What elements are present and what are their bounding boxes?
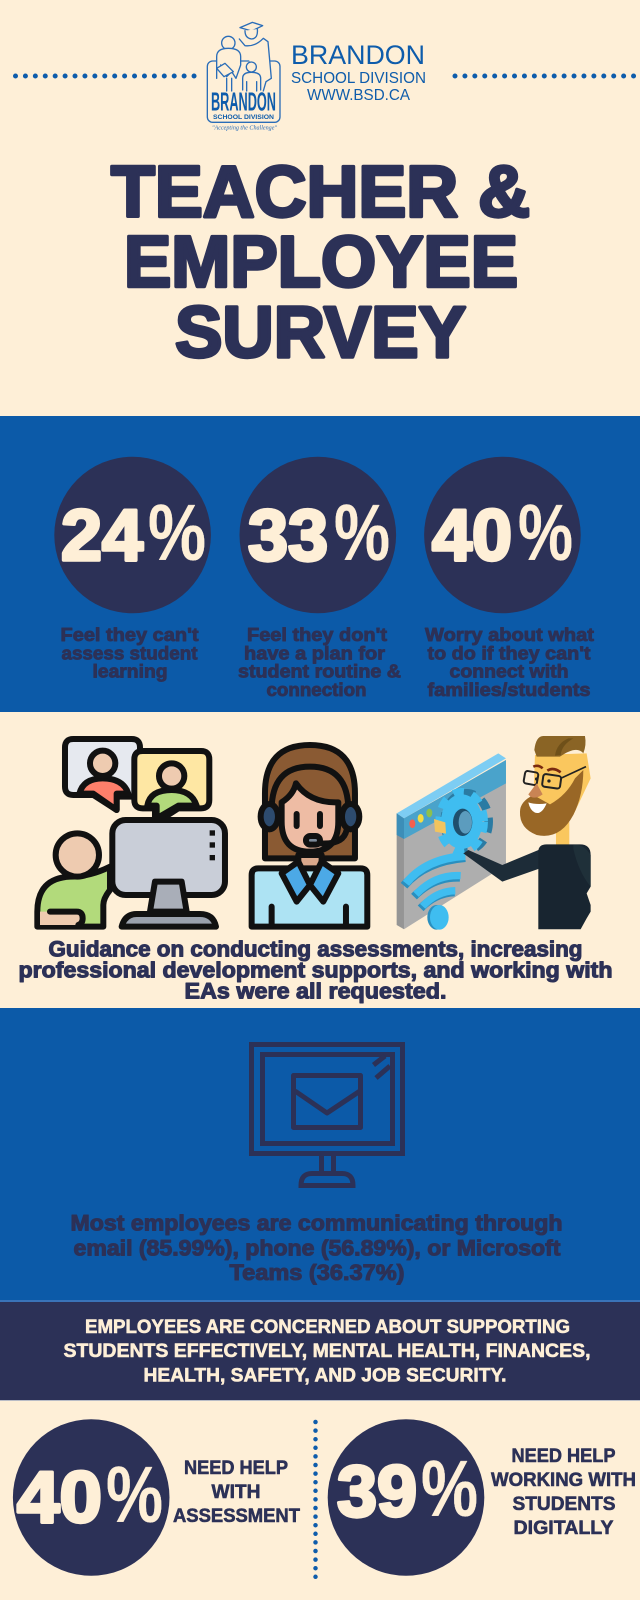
logo: Brandon School Division emblem: BRANDON — [211, 86, 276, 116]
stat 40% need help with assessment: NEED HELP — [184, 1457, 288, 1479]
title — [111, 152, 530, 373]
stat 33%: Feel they don't — [247, 625, 387, 645]
stat 39% need help working digitally — [328, 1419, 636, 1576]
dotted rule right — [455, 74, 634, 78]
text: guidance requested: Guidance on conducting assessments, increasing — [48, 936, 582, 962]
stat 24%: assess student — [62, 644, 198, 664]
stat 24%: learning — [92, 662, 168, 682]
stat 33%: have a plan for — [244, 644, 385, 664]
stat 24%: % — [148, 488, 206, 577]
title: SURVEY — [175, 293, 466, 373]
stat 40%: to do if they can't — [428, 644, 591, 664]
text: guidance requested: professional development supports, and working with — [18, 958, 612, 982]
stat 24% — [54, 457, 211, 682]
stat 40% need help with assessment: ASSESSMENT — [173, 1505, 300, 1527]
organisation name: SCHOOL DIVISION — [291, 70, 426, 87]
stat 24%: Feel they can't — [60, 625, 198, 645]
text: communication channels: Most employees are communicating through — [70, 1210, 562, 1236]
panel: employee concerns — [0, 1300, 640, 1401]
text: communication channels: email (85.99%), phone (56.89%), or Microsoft — [74, 1236, 561, 1260]
organisation name — [291, 40, 426, 104]
stat 40% need help with assessment — [13, 1419, 300, 1576]
stat 33%: student routine & — [238, 662, 401, 682]
logo: Brandon School Division emblem: SCHOOL DIVISION — [213, 114, 274, 121]
stat 40%: families/students — [428, 680, 590, 700]
stat 40%: Worry about what — [425, 625, 594, 645]
panel: help needed — [13, 1419, 636, 1578]
icon: monitor with envelope — [252, 1044, 402, 1186]
panel: employee concerns: EMPLOYEES ARE CONCERNED ABOUT SUPPORTING — [85, 1317, 570, 1338]
title: EMPLOYEE — [124, 222, 518, 302]
panel: stat circles — [0, 416, 640, 712]
stat 33%: % — [334, 488, 390, 577]
stat 24%: 24 — [61, 496, 143, 576]
stat 40%: connect with — [450, 662, 568, 682]
stat 40%: % — [518, 488, 573, 577]
stat 39% need help working digitally: % — [421, 1444, 478, 1533]
panel: employee concerns: STUDENTS EFFECTIVELY, MENTAL HEALTH, FINANCES, — [64, 1341, 590, 1362]
text: communication channels — [70, 1210, 562, 1285]
stat 39% need help working digitally: WORKING WITH — [491, 1469, 636, 1491]
icon: video call at computer — [37, 739, 225, 927]
stat 40% need help with assessment: WITH — [212, 1481, 260, 1503]
organisation name: BRANDON — [291, 40, 425, 70]
stat 40% need help with assessment: % — [106, 1450, 163, 1539]
title: TEACHER & — [111, 152, 530, 232]
stat 33%: connection — [266, 680, 366, 700]
organisation name: WWW.BSD.CA — [307, 87, 410, 104]
text: guidance requested — [18, 936, 612, 1004]
icon: support agent with headset — [252, 745, 367, 927]
header: logo and dotted rules — [16, 22, 634, 132]
text: guidance requested: EAs were all requested. — [184, 978, 446, 1004]
stat 39% need help working digitally: 39 — [337, 1452, 417, 1532]
stat 33%: 33 — [248, 496, 328, 576]
dotted rule left — [16, 74, 195, 78]
text: communication channels: Teams (36.37%) — [230, 1260, 404, 1285]
stat 40% need help with assessment: 40 — [17, 1458, 102, 1538]
stat 40% — [424, 457, 594, 700]
panel: communication channels — [0, 1008, 640, 1300]
stat 39% need help working digitally: DIGITALLY — [514, 1517, 614, 1539]
panel: employee concerns: HEALTH, SAFETY, AND JOB SECURITY. — [144, 1366, 507, 1386]
icon: man adjusting settings on wifi window — [397, 736, 591, 930]
dotted divider — [313, 1422, 318, 1578]
stat 40%: 40 — [432, 496, 512, 576]
stat 33% — [238, 457, 401, 700]
logo: Brandon School Division emblem — [207, 22, 280, 132]
stat 39% need help working digitally: STUDENTS — [512, 1493, 616, 1515]
logo: Brandon School Division emblem: "Accepting the Challenge" — [212, 126, 277, 132]
stat 39% need help working digitally: NEED HELP — [512, 1445, 616, 1467]
panel: requested supports — [18, 736, 612, 1004]
